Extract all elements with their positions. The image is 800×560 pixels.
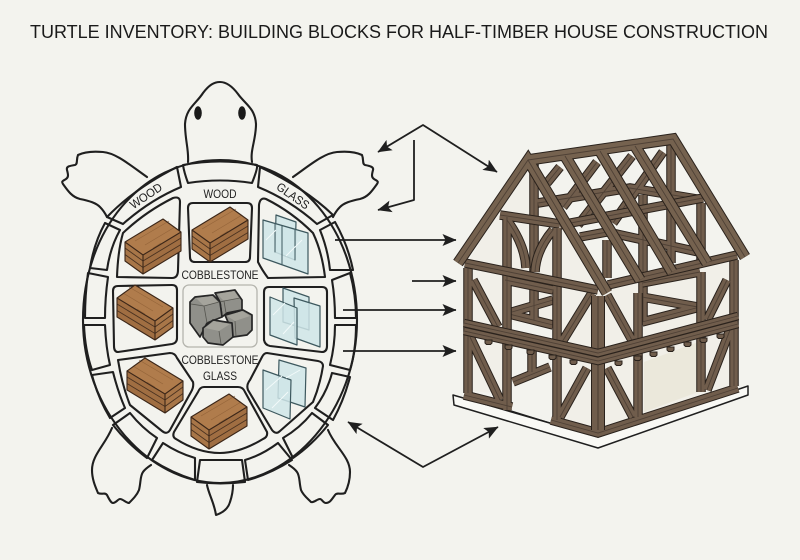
turtle diagram [62, 82, 378, 515]
eave beams [465, 255, 737, 290]
icon: wood stack 3 [117, 285, 173, 340]
tail [207, 485, 233, 515]
left front flipper [62, 152, 147, 217]
right rear flipper [289, 430, 350, 503]
floor beams [464, 316, 738, 366]
icon: glass panes middle [270, 288, 320, 347]
arrow: row 1 [335, 239, 456, 241]
rear frame [505, 139, 703, 382]
icon: cobblestones [190, 290, 252, 345]
label: wood left: WOOD [127, 180, 165, 212]
shell outline [83, 160, 357, 483]
arrow: bottom fork [348, 422, 498, 467]
arrows [335, 125, 498, 467]
half-timber house [453, 139, 748, 448]
label: wood center: WOOD [204, 187, 237, 201]
label: cobblestone top: COBBLESTONE [182, 268, 258, 282]
arrow: row 3 [343, 309, 456, 311]
icon: glass panes top [263, 215, 308, 274]
left rear flipper [92, 428, 151, 503]
label: glass right: GLASS [274, 180, 312, 212]
stone panel frame [183, 285, 257, 347]
label: glass bottom: GLASS [203, 369, 237, 383]
icon: glass panes bottom [263, 360, 306, 419]
icon: wood stack 1 [125, 219, 181, 274]
front corner post [591, 296, 605, 430]
arrow: bent left [378, 140, 414, 210]
arrow: row 4 [343, 350, 456, 352]
inner cells [113, 198, 327, 453]
title: TURTLE INVENTORY: BUILDING BLOCKS FOR HALF-TIMBER HOUSE CONSTRUCTION [30, 22, 768, 42]
icon: wood stack 5 [191, 394, 247, 449]
wall infill [464, 165, 738, 432]
icon: wood stack 4 [127, 358, 183, 413]
right front flipper [293, 152, 378, 217]
turtle head [185, 82, 256, 162]
arrow: row 2 short [412, 280, 456, 282]
arrow: top fork [378, 125, 497, 172]
wall frame [464, 198, 738, 433]
roof rafters [458, 139, 745, 293]
label: cobblestone bottom: COBBLESTONE [182, 353, 258, 367]
icon: wood stack 2 [192, 207, 248, 262]
peripheral scutes [84, 162, 356, 484]
foundation slab [453, 386, 748, 448]
